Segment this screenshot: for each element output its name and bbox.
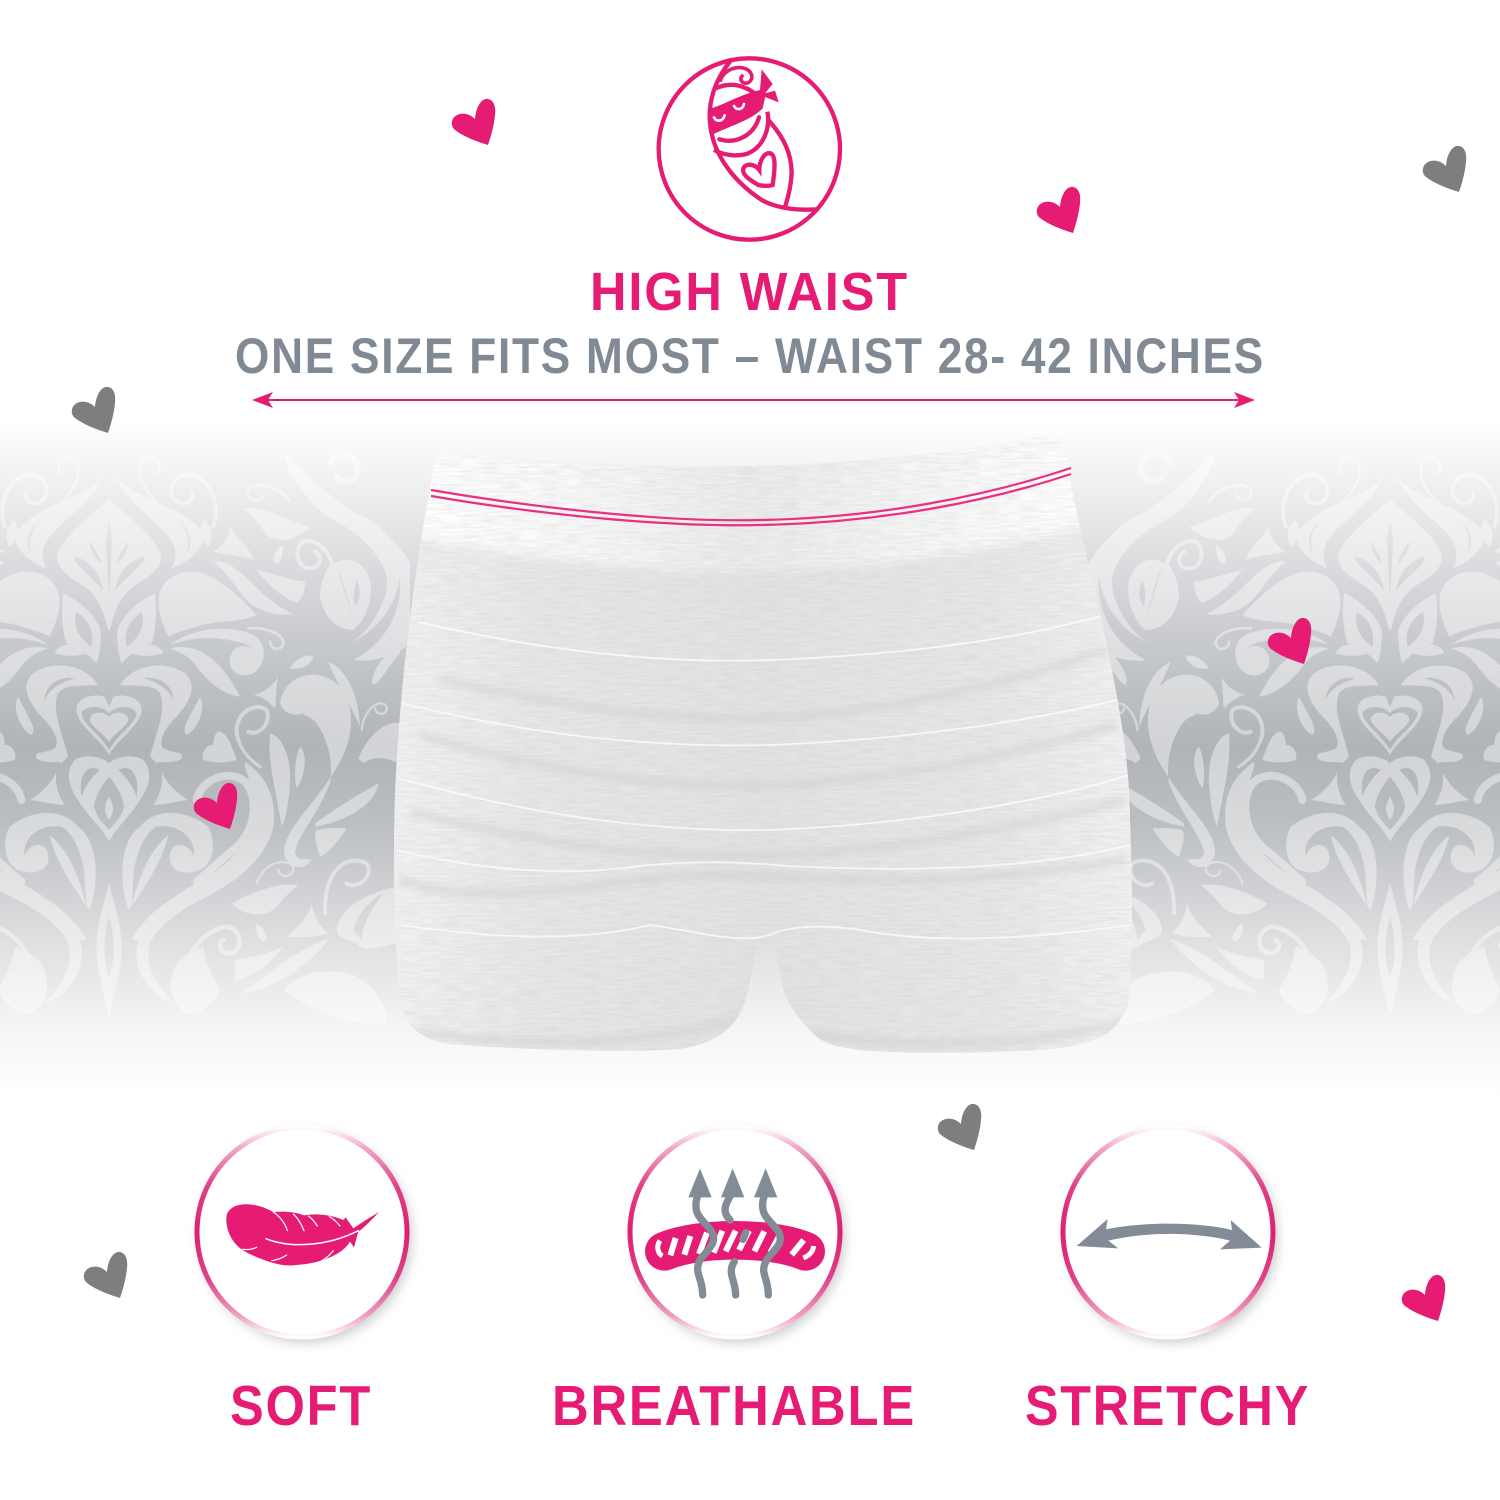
decorative pink heart 3	[1268, 618, 1311, 664]
label: stretchy: STRETCHY	[1025, 1374, 1310, 1438]
label: soft: SOFT	[230, 1374, 372, 1438]
decorative grey heart 3	[938, 1104, 981, 1150]
decorative pink heart 1	[452, 99, 495, 145]
decorative pink heart 4	[194, 783, 237, 829]
decorative pink heart 2	[1037, 187, 1080, 233]
icon: feather	[226, 1204, 379, 1266]
label: breathable: BREATHABLE	[552, 1374, 916, 1438]
product: white mesh shorts	[385, 430, 1145, 1060]
icon: air flowing through fabric	[658, 1168, 814, 1295]
decorative pink heart 5	[1402, 1275, 1445, 1321]
feature: soft	[197, 1127, 411, 1342]
decorative grey heart 2	[72, 387, 115, 433]
decorative grey heart 4	[84, 1252, 127, 1298]
pink waist stripes	[431, 468, 1071, 525]
feature: breathable	[630, 1127, 844, 1342]
subtitle: size range: ONE SIZE FITS MOST – WAIST 28- 42 INCHES	[235, 328, 1265, 384]
decorative grey heart 1	[1423, 146, 1466, 192]
brand logo: swaddled baby in circle	[659, 58, 840, 240]
icon: stretch arrow	[1077, 1219, 1262, 1249]
waist width arrow	[252, 392, 1255, 408]
fabric seams	[396, 612, 1130, 938]
feature: stretchy	[1063, 1127, 1277, 1342]
waistband	[410, 430, 1090, 572]
title: HIGH WAIST	[590, 262, 909, 322]
damask band background	[0, 420, 1500, 1095]
